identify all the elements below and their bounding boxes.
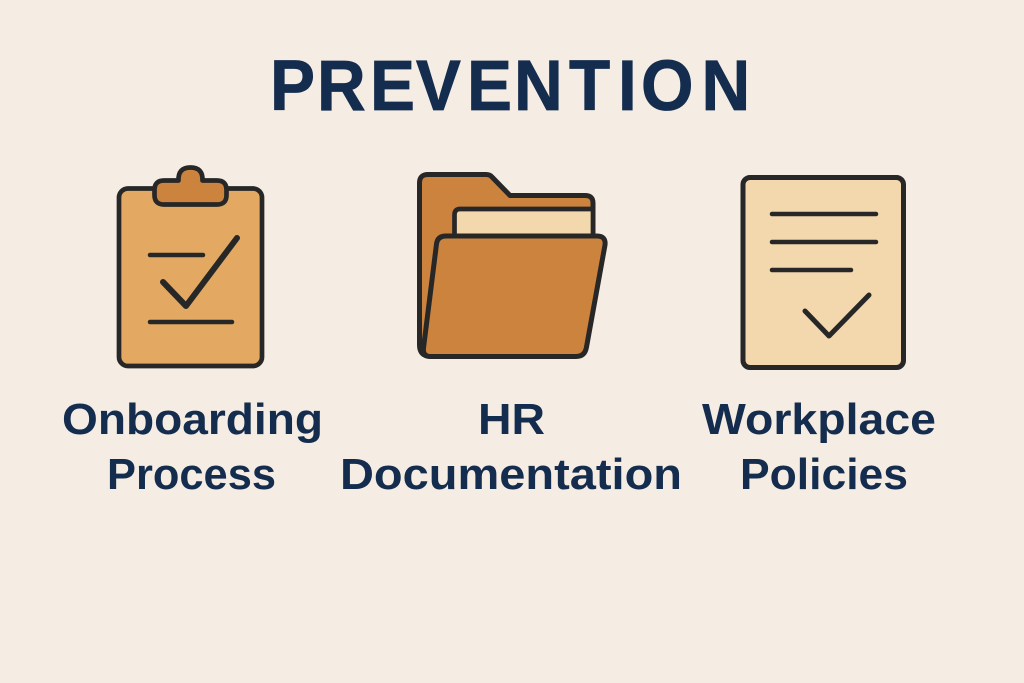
label: hr documentation <box>340 395 682 499</box>
icon: policy document <box>743 178 904 368</box>
label: workplace policies: Policies <box>740 450 908 499</box>
label: workplace policies <box>702 395 936 499</box>
icon: clipboard <box>119 168 262 366</box>
label: hr documentation: Documentation <box>340 450 682 499</box>
label: onboarding process: Onboarding <box>62 395 323 444</box>
label: onboarding process: Process <box>107 450 276 499</box>
icon: folder <box>420 174 605 356</box>
title: PREVENTION <box>270 45 750 125</box>
label: hr documentation: HR <box>478 395 545 444</box>
label: workplace policies: Workplace <box>702 395 936 444</box>
label: onboarding process <box>62 395 323 499</box>
